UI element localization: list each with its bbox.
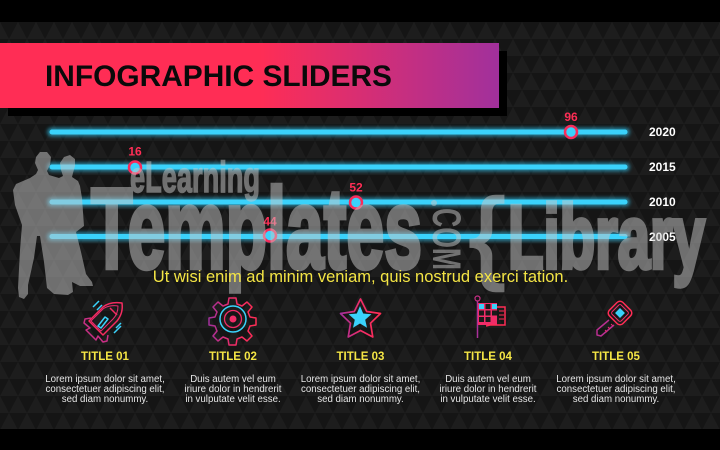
column: title 05: sed diam nonummy. (573, 394, 659, 405)
subtitle: Ut wisi enim ad minim veniam, quis nostrud exerci tation. (153, 268, 568, 286)
slider: 2015: 2015 (649, 160, 676, 174)
icon: flag (475, 296, 505, 338)
column: title 04: Duis autem vel eum (445, 374, 531, 385)
watermark figures (13, 152, 93, 299)
icon: gear (209, 298, 256, 345)
icon: key (597, 300, 633, 336)
watermark logo (13, 152, 705, 299)
column: title 03 (301, 351, 420, 405)
column: title 03: consectetuer adipiscing elit, (301, 384, 420, 395)
column: title 01: TITLE 01 (81, 351, 130, 363)
column: title 04: iriure dolor in hendrerit (440, 384, 537, 395)
column: title 01: sed diam nonummy. (62, 394, 148, 405)
column: title 03: sed diam nonummy. (317, 394, 404, 405)
slider: 2005: 44 (263, 214, 277, 228)
column: title 02: TITLE 02 (209, 351, 257, 363)
column: title 04 (440, 351, 537, 405)
column: title 04: in vulputate velit esse. (440, 394, 536, 405)
column: title 05 (556, 351, 676, 405)
column: title 05: Lorem ipsum dolor sit amet, (556, 374, 676, 385)
slider: 2020: 2020 (649, 125, 676, 139)
watermark logo: { (469, 178, 505, 292)
slider: 2010: 2010 (649, 195, 676, 209)
column: title 02: in vulputate velit esse. (185, 394, 281, 405)
column: title 02 (185, 351, 282, 405)
column: title 01: Lorem ipsum dolor sit amet, (45, 374, 165, 385)
column: title 03: Lorem ipsum dolor sit amet, (301, 374, 420, 385)
column: title 04: TITLE 04 (464, 351, 513, 363)
column: title 05: consectetuer adipiscing elit, (556, 384, 676, 395)
column: title 01: consectetuer adipiscing elit, (45, 384, 165, 395)
column: title 01 (45, 351, 165, 405)
slider: 2010 (47, 180, 676, 209)
column: title 05: TITLE 05 (592, 351, 641, 363)
title: INFOGRAPHIC SLIDERS (45, 60, 392, 93)
slider: 2020: 96 (564, 110, 578, 124)
column: title 03: TITLE 03 (337, 351, 384, 363)
watermark logo: Templates (91, 166, 422, 293)
slider: 2005: 2005 (649, 230, 676, 244)
watermark logo: eLearning (130, 153, 260, 202)
slider: 2010: 52 (349, 180, 363, 194)
column: title 02: Duis autem vel eum (190, 374, 276, 385)
title banner (0, 43, 507, 116)
slider: 2015: 16 (128, 144, 142, 158)
slider: 2015 (47, 144, 676, 174)
slider: 2005 (47, 214, 676, 244)
icon: rocket (84, 301, 122, 342)
icon: star (340, 299, 380, 337)
watermark logo: COM (424, 208, 468, 270)
slider: 2020 (47, 110, 676, 139)
column: title 02: iriure dolor in hendrerit (185, 384, 282, 395)
